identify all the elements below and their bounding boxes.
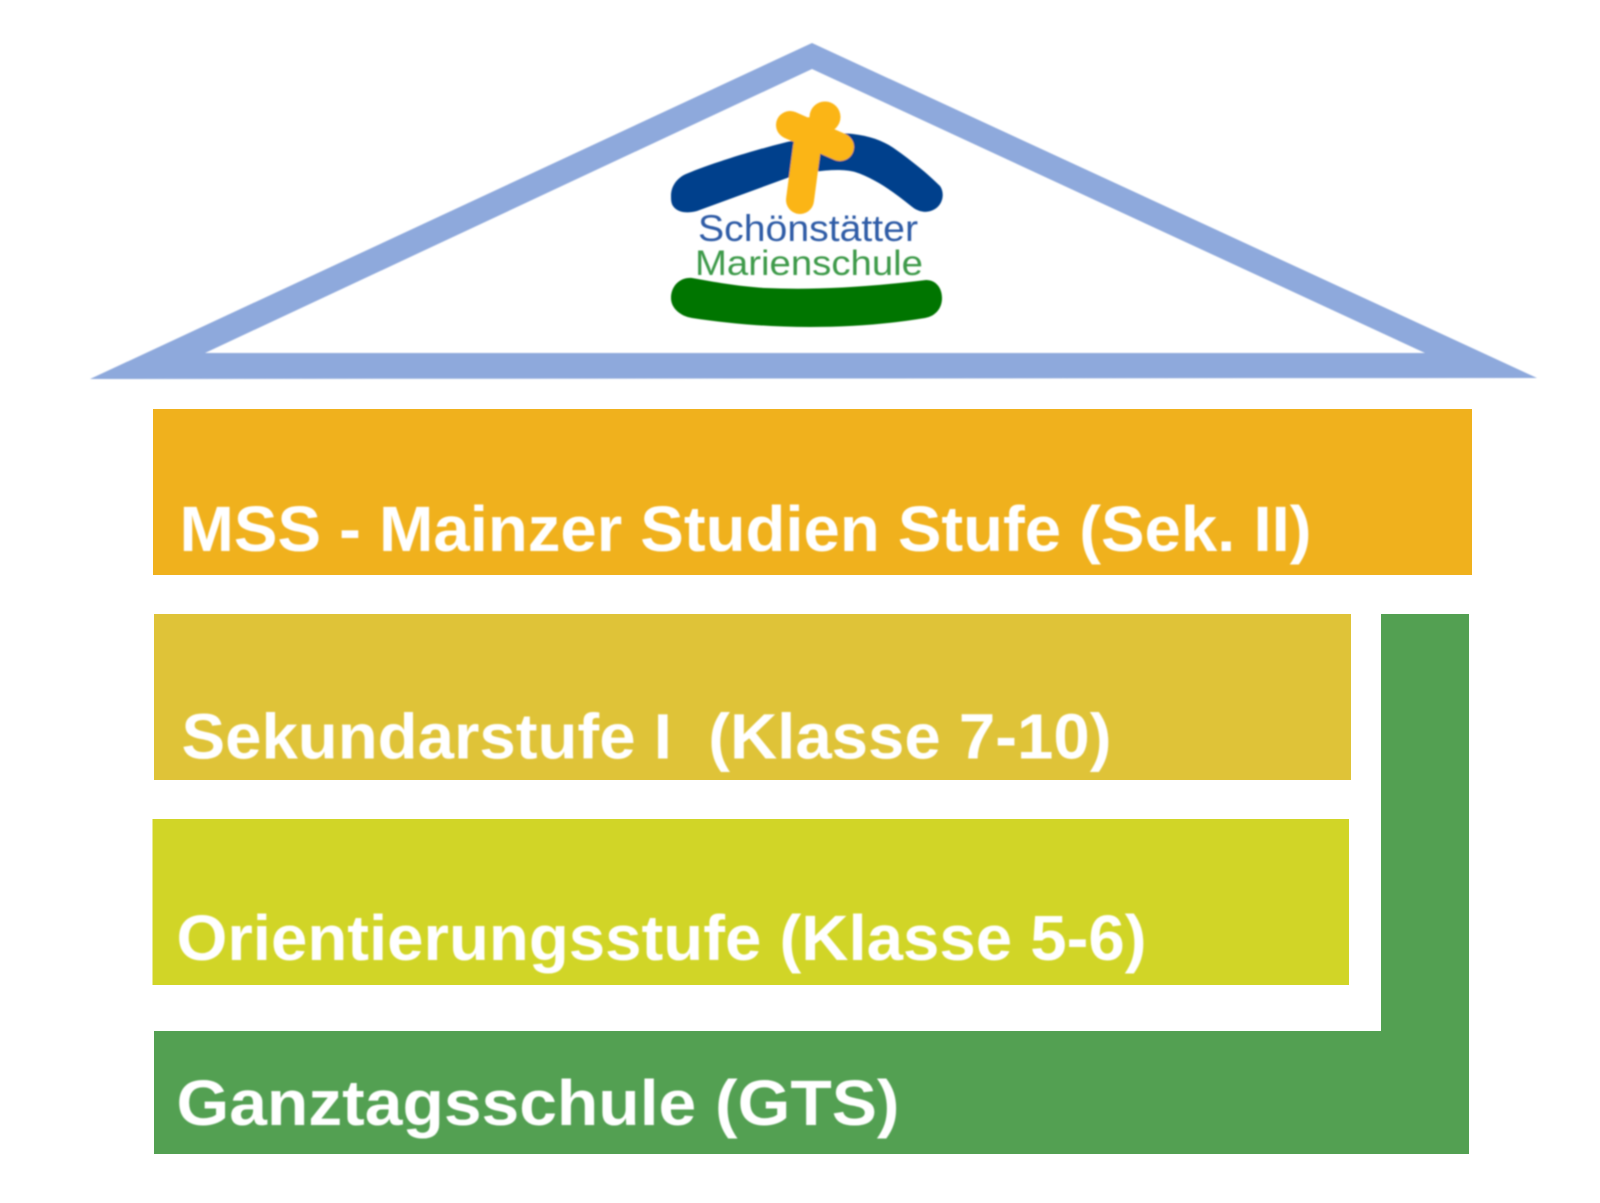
icon: green base — [671, 278, 942, 327]
panel: Orientierungsstufe — [152, 819, 1349, 985]
label: Sekundarstufe I: Sekundarstufe I (Klasse 7-10) — [182, 700, 1112, 772]
roof: triangular outline — [90, 43, 1537, 379]
label: Orientierungsstufe: Orientierungsstufe (Klasse 5-6) — [176, 902, 1146, 974]
logo text: Marienschule: Marienschule — [695, 244, 923, 283]
icon: blue arch — [671, 133, 943, 212]
icon: yellow cross — [790, 102, 840, 200]
panel: Sekundarstufe I — [154, 614, 1351, 780]
logo: Schönstätter Marienschule — [671, 102, 943, 327]
panel: MSS — [153, 409, 1472, 575]
label: MSS: MSS - Mainzer Studien Stufe (Sek. II) — [180, 493, 1312, 565]
logo text: Schönstätter: Schönstätter — [698, 208, 918, 249]
label: Ganztagsschule: Ganztagsschule (GTS) — [176, 1067, 900, 1139]
